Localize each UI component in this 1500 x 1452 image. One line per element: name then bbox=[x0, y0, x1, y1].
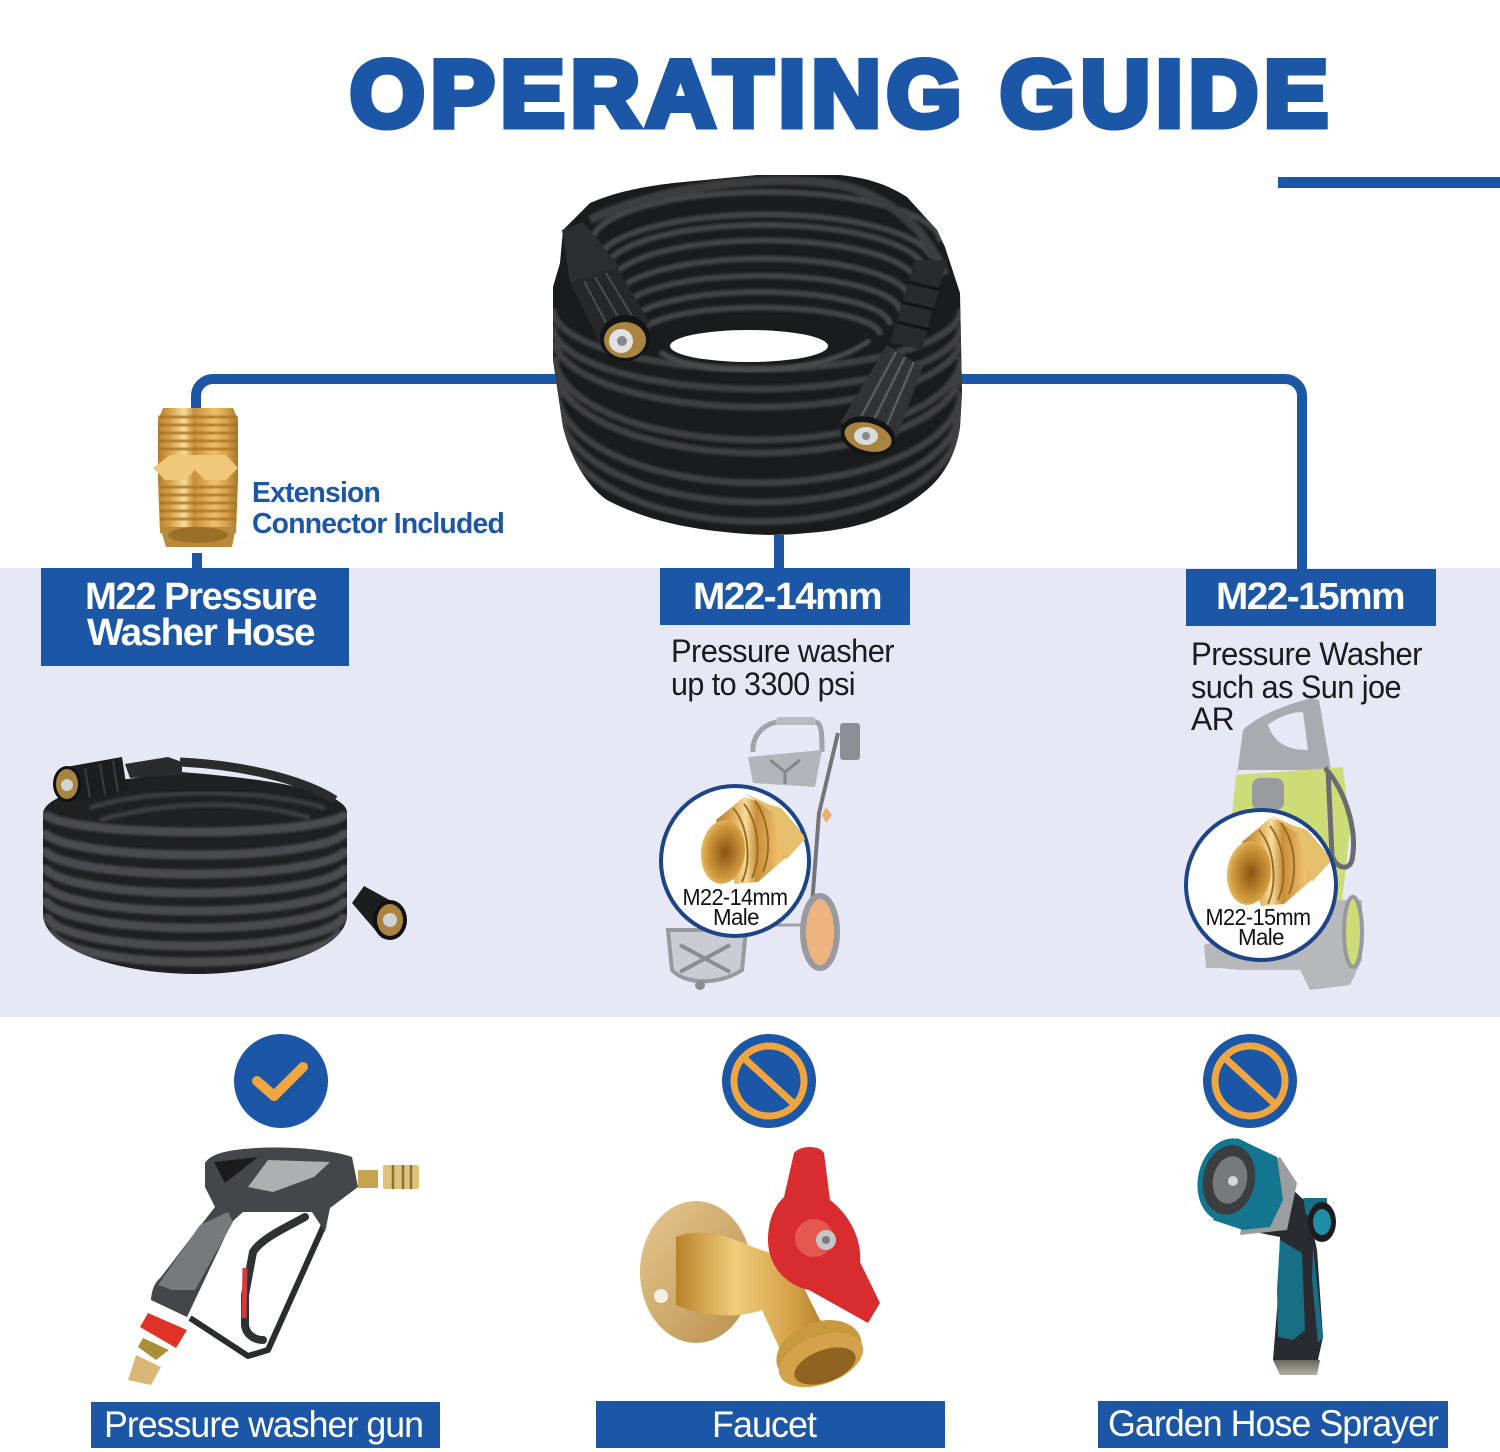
gun vents bbox=[214, 1157, 258, 1183]
right end fitting bbox=[352, 886, 407, 940]
gun red nozzle cap bbox=[140, 1313, 187, 1348]
sprayer handle bbox=[1245, 1187, 1323, 1360]
text: pressure washer up to 3300 psi: up to 3300 psi bbox=[671, 666, 855, 702]
icon: check mark bbox=[234, 1034, 328, 1128]
text: pressure washer such as Sun joe AR: Pressure Washer bbox=[1191, 636, 1423, 672]
title accent bar bbox=[1278, 177, 1500, 188]
right hose fitting bbox=[836, 260, 947, 462]
pressure washer gun bbox=[128, 1148, 419, 1385]
upright electric pressure washer bbox=[1204, 698, 1362, 990]
label: garden hose sprayer: Garden Hose Sprayer bbox=[1108, 1403, 1439, 1444]
detail circle: M22-14mm male: Male bbox=[713, 904, 759, 930]
gun trigger bbox=[245, 1217, 305, 1340]
label: M22 pressure washer hose: Washer Hose bbox=[87, 612, 314, 654]
generator pressure washer bbox=[668, 717, 860, 990]
connector lines bbox=[196, 379, 1302, 572]
left hose fitting bbox=[562, 222, 650, 361]
icon: prohibited faucet bbox=[722, 1034, 816, 1128]
detail circle: M22-15mm male bbox=[1186, 810, 1336, 960]
detail circle: M22-14mm male: M22-14mm bbox=[682, 884, 788, 910]
label: faucet bbox=[596, 1401, 945, 1448]
icon: prohibited sprayer bbox=[1203, 1034, 1297, 1128]
text: pressure washer such as Sun joe AR bbox=[1191, 636, 1423, 737]
left end fitting bbox=[53, 757, 335, 803]
garden hose sprayer bbox=[1190, 1132, 1336, 1375]
label: faucet: Faucet bbox=[712, 1404, 818, 1445]
large coiled hose bbox=[553, 175, 962, 535]
sprayer grey band bbox=[1240, 1157, 1297, 1235]
coil inner opening bbox=[670, 330, 828, 362]
extension connector bbox=[153, 408, 238, 547]
sprayer knob bbox=[1303, 1198, 1327, 1215]
label: M22 pressure washer hose bbox=[41, 568, 349, 666]
coiled hose, flat view bbox=[43, 757, 407, 974]
title: OPERATING GUIDE bbox=[350, 41, 1334, 146]
coil rings bbox=[553, 181, 961, 521]
label: pressure washer gun: Pressure washer gun bbox=[104, 1404, 423, 1445]
detail circle: M22-15mm male: Male bbox=[1238, 924, 1284, 950]
gun frame bbox=[190, 1225, 324, 1356]
text: pressure washer such as Sun joe AR: AR bbox=[1191, 701, 1234, 737]
label: M22-14mm bbox=[660, 568, 910, 625]
gun outlet fitting bbox=[358, 1170, 378, 1188]
coil rings bbox=[44, 793, 346, 962]
detail circle: M22-15mm male: M22-15mm bbox=[1206, 904, 1310, 930]
text: pressure washer up to 3300 psi bbox=[671, 633, 895, 702]
sprayer teal head bbox=[1213, 1138, 1283, 1230]
extension connector caption: Extension bbox=[252, 477, 380, 509]
label: M22-15mm: M22-15mm bbox=[1216, 576, 1404, 618]
extension connector caption bbox=[252, 477, 504, 540]
gun body bbox=[151, 1148, 358, 1317]
sprayer base bbox=[1273, 1360, 1320, 1375]
label: M22 pressure washer hose: M22 Pressure bbox=[85, 576, 316, 618]
text: pressure washer up to 3300 psi: Pressure washer bbox=[671, 633, 895, 669]
detail circle: M22-14mm male bbox=[661, 786, 809, 936]
label: M22-14mm: M22-14mm bbox=[693, 576, 881, 618]
label: M22-15mm bbox=[1186, 569, 1436, 626]
text: pressure washer such as Sun joe AR: such as Sun joe bbox=[1191, 669, 1401, 705]
gun panel bbox=[248, 1160, 330, 1192]
background band bbox=[0, 568, 1500, 1017]
extension connector caption: Connector Included bbox=[252, 508, 504, 540]
faucet bbox=[640, 1147, 880, 1398]
